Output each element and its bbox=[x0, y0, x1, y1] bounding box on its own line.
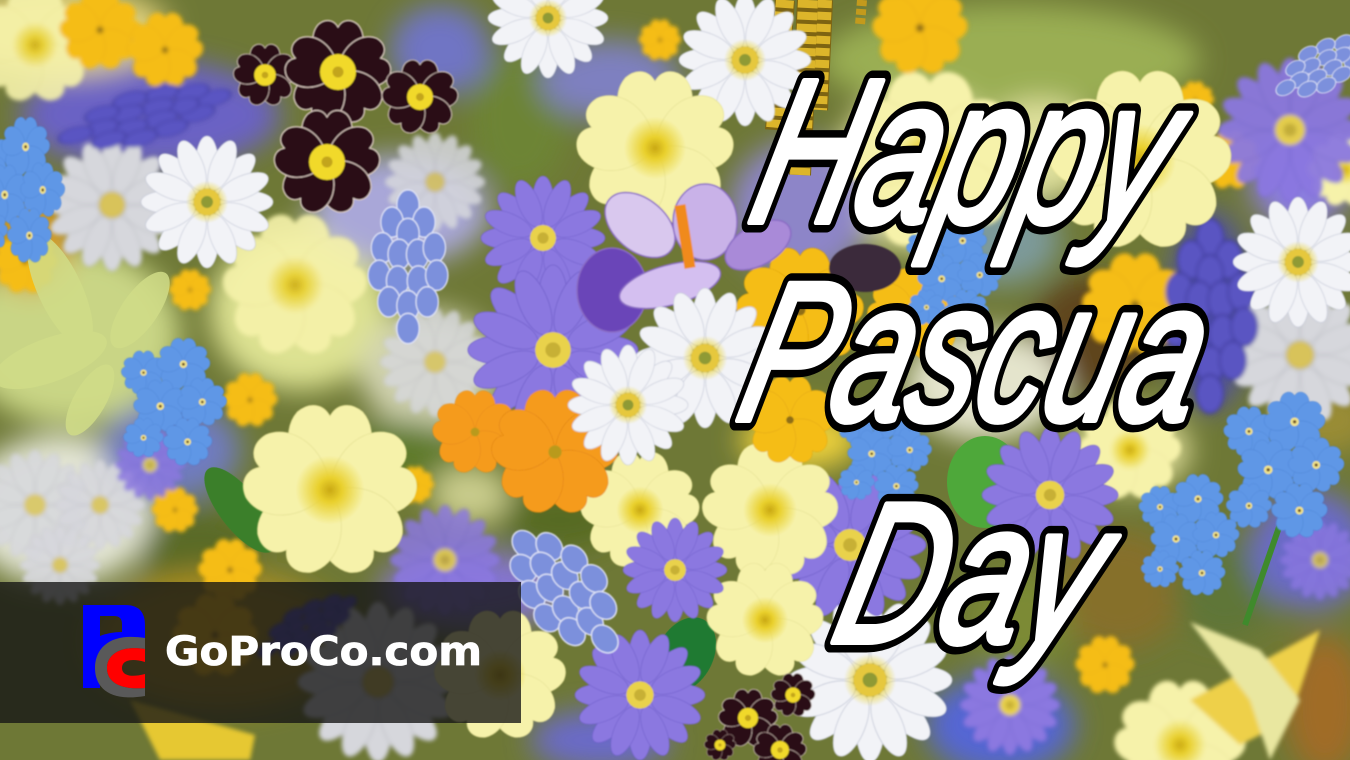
daffodil under panel bbox=[130, 700, 255, 760]
title line: Day: Day bbox=[817, 462, 1138, 685]
logo text: GoProCo.com bbox=[165, 629, 482, 675]
title line: Happy bbox=[742, 70, 1199, 275]
title: Happy Pascua Day bbox=[722, 38, 1233, 685]
leaf: green left of primrose bbox=[204, 467, 272, 553]
title line: Day bbox=[824, 494, 1128, 694]
title line: Day: Day bbox=[817, 462, 1138, 685]
leaf: dark green lower centre bbox=[664, 617, 716, 686]
dark seed head bbox=[829, 244, 901, 292]
purple asters bbox=[396, 123, 1176, 760]
dark primulas bbox=[231, 20, 817, 760]
forget-me-not clusters bbox=[0, 117, 1346, 598]
front daisies bbox=[566, 288, 772, 466]
orange primroses bbox=[429, 390, 623, 520]
logo: PC mark bbox=[83, 605, 145, 697]
leaves: pale green left bbox=[0, 238, 170, 436]
primroses bbox=[237, 71, 1238, 745]
daffodil right bbox=[1190, 630, 1320, 745]
logo panel bbox=[0, 582, 521, 723]
grape hyacinths bbox=[368, 19, 1350, 678]
title line: Pascua bbox=[730, 273, 1210, 432]
leaf: bright green centre right bbox=[947, 436, 1008, 528]
panel background bbox=[0, 582, 521, 723]
yellow catkins bbox=[775, 0, 862, 175]
stem right bbox=[1242, 524, 1282, 626]
small aster bbox=[622, 517, 728, 624]
yellow pansies bbox=[732, 248, 966, 468]
foliage bbox=[0, 225, 1285, 703]
crocus bbox=[577, 179, 799, 332]
